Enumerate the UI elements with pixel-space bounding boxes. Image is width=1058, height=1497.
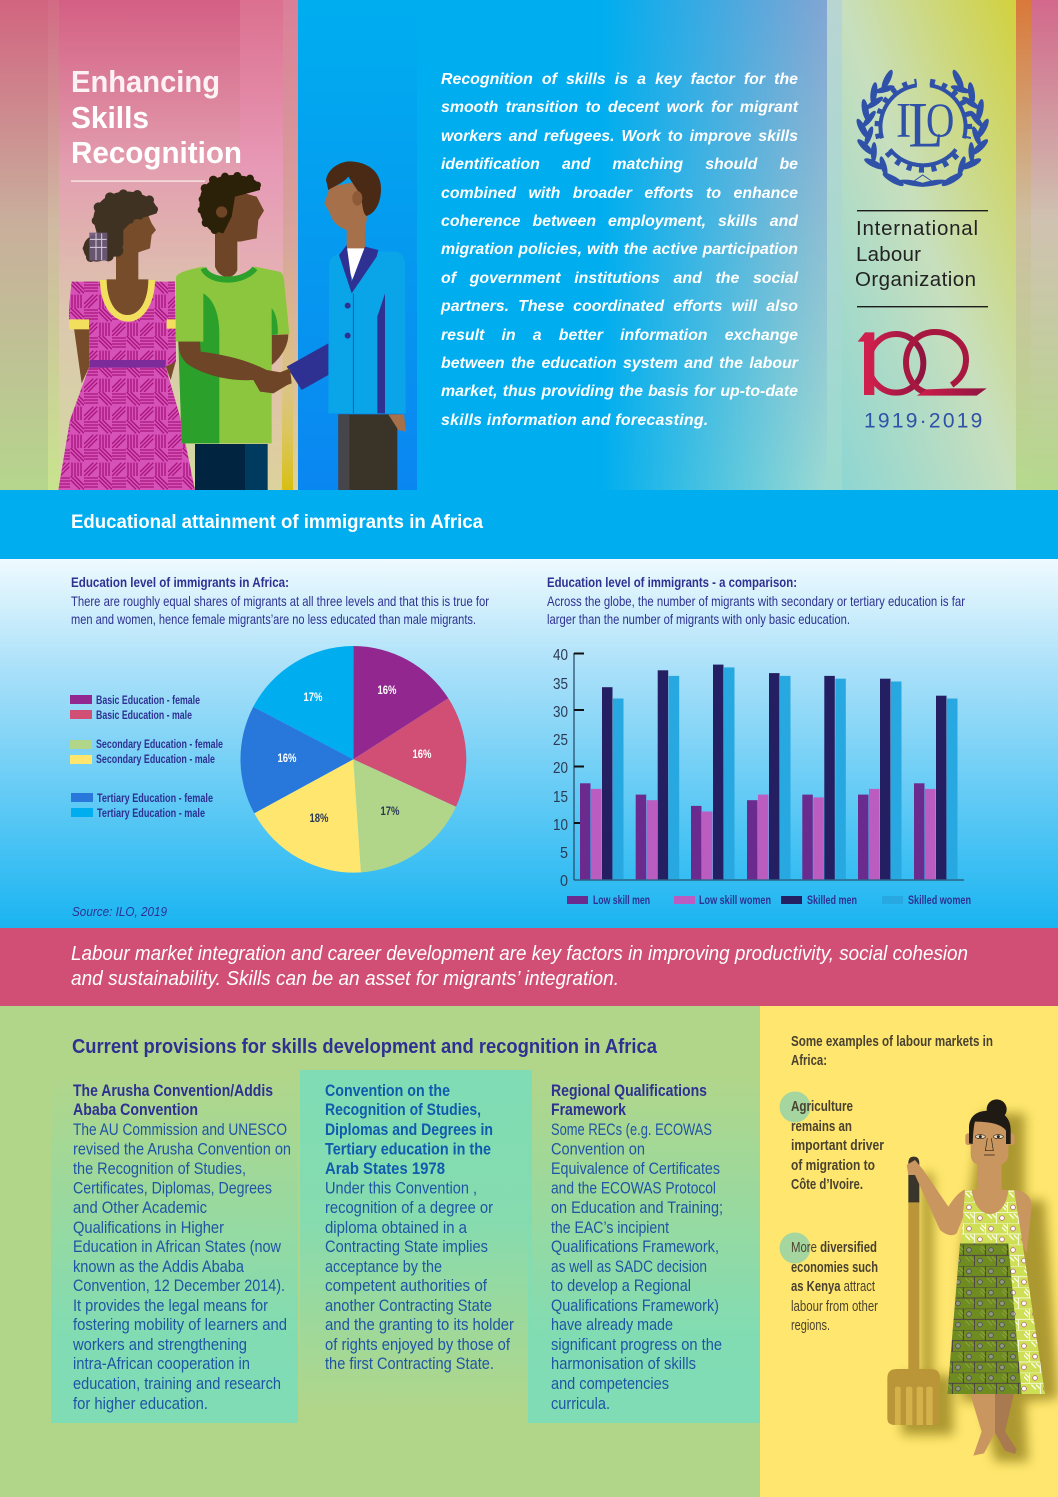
text block: pie chart intro: There are roughly equal shares of migrants at all three levels and that this is true for [71,593,489,609]
panel: Regional Qualifications Framework: significant progress on the [551,1336,722,1354]
panel: Regional Qualifications Framework: Qualifications Framework, [551,1238,719,1256]
text block: recognition of skills intro paragraph: coherence between employment, skills and [441,213,798,230]
text: agriculture example: Agriculture [791,1098,853,1115]
panel: Regional Qualifications Framework: Regional Qualifications [551,1082,707,1100]
figure: woman in pink dress [58,189,195,490]
text: agriculture example: of migration to [791,1157,875,1174]
bar chart axis labels: 15 [553,789,568,806]
text block: pie chart intro [71,574,489,627]
logo text: International Labour Organization: Labour [856,243,921,266]
panel: Regional Qualifications Framework: have already made [551,1316,673,1334]
illustration: woman farmer with pitchfork [887,1099,1058,1462]
bar chart axis labels: 30 [553,704,568,721]
panel: Arusha Convention: known as the Addis Ababa [73,1258,245,1276]
pie chart: 18% [310,813,328,825]
title: Recognition [71,135,242,170]
bars: low skill men [580,783,924,879]
bar chart axis labels [553,647,568,890]
section heading band: educational attainment [0,490,1058,560]
bar chart axis labels: 5 [560,845,568,862]
text block: bar chart intro: Across the globe, the number of migrants with secondary or tertiary education is far [547,593,965,609]
panel: Arusha Convention: fostering mobility of learners and [73,1316,287,1334]
text block: labour market examples [780,1033,993,1334]
logo: ILO 100 years: 1919·2019 [864,410,982,433]
text block: labour market examples: Africa: [791,1052,827,1069]
legend: bar chart: Low skill men [593,893,650,907]
text block: recognition of skills intro paragraph: combined with broader efforts to enhance [441,185,798,202]
text block: recognition of skills intro paragraph: of government institutions and the social [441,270,798,287]
title: Skills [71,100,149,135]
panel: Arab States Convention [300,1070,532,1410]
logo: ILO emblem [854,68,991,188]
legend: pie chart: Tertiary Education - female [97,791,213,805]
legend: bar chart: Skilled men [807,893,857,907]
text: agriculture example: important driver [791,1137,884,1154]
panel: Arab States Convention: and the granting to its holder [325,1316,514,1334]
icon: green circle behind Agriculture [780,1092,810,1122]
panel: Arab States Convention: the first Contracting State. [325,1355,494,1373]
legend: bar chart [567,893,971,907]
panel: Arab States Convention: Recognition of Studies, [325,1101,481,1119]
text block: recognition of skills intro paragraph: identification and matching should be [441,156,798,173]
logo letters: ILO: L [908,90,943,162]
callout band: labour market integration: Labour market integration and career development are key factors in improving productivity, social cohesion [71,943,968,965]
panel: Regional Qualifications Framework: the EAC’s incipient [551,1219,669,1237]
legend: pie chart: Secondary Education - female [96,737,223,751]
panel: Regional Qualifications Framework: to develop a Regional [551,1277,691,1295]
pie chart [240,646,466,873]
panel: Regional Qualifications Framework: Some RECs (e.g. ECOWAS [551,1121,712,1139]
logo letters: ILO: I [896,92,911,148]
text: agriculture example [791,1098,884,1193]
text block: pie chart intro: Education level of immigrants in Africa: [71,574,289,590]
panel: Arab States Convention: Tertiary education in the [325,1140,491,1158]
text block: recognition of skills intro paragraph: between the education system and the labour [441,355,798,372]
text block: pie chart intro: men and women, hence female migrants’are no less educated than male migrants. [71,611,476,627]
panel: Arusha Convention: for higher education. [73,1395,208,1413]
icon: cog wheel arcs [878,82,969,169]
text: diversified economies example [791,1239,878,1334]
figure: man in blue jacket [263,161,406,490]
title [71,64,242,182]
text: agriculture example: Côte d’Ivoire. [791,1176,863,1193]
panel: Arab States Convention: diploma obtained in a [325,1219,468,1237]
logo text: International Labour Organization: International [856,217,978,240]
pie chart: 17% [380,806,400,818]
panel: Regional Qualifications Framework: harmonisation of skills [551,1355,696,1373]
pitchfork [887,1157,940,1425]
panel: Regional Qualifications Framework: as well as SADC decision [551,1258,707,1276]
panel: Arusha Convention: education, training and research [73,1375,281,1393]
text: agriculture example: remains an [791,1118,852,1135]
panel: green provisions background [0,1006,760,1497]
legend: pie chart: Secondary Education - male [96,752,215,766]
title: Enhancing [71,64,220,99]
panel: Arusha Convention: The Arusha Convention/Addis [73,1082,273,1100]
panel: Regional Qualifications Framework: Equivalence of Certificates [551,1160,720,1178]
icon: green circle behind More [780,1232,810,1264]
panel: Arab States Convention: recognition of a degree or [325,1199,493,1217]
text block: recognition of skills intro paragraph: partners. These coordinated efforts will also [441,298,798,315]
text: diversified economies example: labour from other [791,1298,878,1315]
panel: Arab States Convention: Under this Convention , [325,1180,477,1198]
panel: Arusha Convention: Education in African States (now [73,1238,281,1256]
panel: Arusha Convention: Certificates, Diplomas, Degrees [73,1180,272,1198]
pie chart: 16% [378,685,396,697]
panel: Arusha Convention: Ababa Convention [73,1101,198,1119]
pie chart: 16% [278,753,296,765]
text: diversified economies example: as Kenya attract [791,1278,876,1295]
text block: recognition of skills intro paragraph: workers and refugees. Work to improve skills [441,128,798,145]
logo letters: ILO: O [926,95,954,148]
panel: Regional Qualifications Framework: on Education and Training; [551,1199,723,1217]
text: diversified economies example: economies such [791,1259,878,1276]
figure: woman farmer [907,1099,1045,1456]
panel: Arab States Convention: acceptance by the [325,1258,442,1276]
bars: skilled men [602,665,946,879]
legend: pie chart [70,693,223,820]
text: diversified economies example: regions. [791,1317,830,1334]
icon: laurel wreath [854,68,991,188]
panel: Arusha Convention: intra-African cooperation in [73,1355,250,1373]
pie chart: 17% [304,692,322,704]
soft shadow of figure [902,1113,1058,1462]
panel: Arusha Convention [51,1075,298,1423]
legend: bar chart: Skilled women [908,893,971,907]
panel: Regional Qualifications Framework: Convention on [551,1140,645,1158]
text block: recognition of skills intro paragraph: migration policies, with the active participation [441,241,798,258]
text block: recognition of skills intro paragraph: skills information and forecasting. [441,412,708,429]
figure: man in green shirt [176,172,290,490]
legend: pie chart: Tertiary Education - male [97,806,205,820]
panel: Regional Qualifications Framework: and competencies [551,1375,669,1393]
pie chart: 16% [412,749,432,761]
bar chart axis labels: 40 [553,647,568,664]
text block: recognition of skills intro paragraph: Recognition of skills is a key factor for the [441,71,798,88]
panel: Arusha Convention: workers and strengthening [72,1336,247,1354]
text block: recognition of skills intro paragraph: smooth transition to decent work for migrant [441,99,798,116]
text block: labour market examples: Some examples of labour markets in [791,1033,993,1050]
bar chart [553,647,971,907]
heading: current provisions: Current provisions for skills development and recognition in Africa [72,1036,658,1058]
source note: Source: ILO, 2019 [72,904,167,919]
panel: Arab States Convention: Contracting State implies [325,1238,488,1256]
panel: Regional Qualifications Framework: Qualifications Framework) [551,1297,719,1315]
text block: recognition of skills intro paragraph [440,71,799,429]
panel: Arusha Convention: Qualifications in Higher [73,1219,224,1237]
panel: Regional Qualifications Framework: Framework [551,1101,627,1119]
panel: Arab States Convention: competent authorities of [325,1277,487,1295]
panel: Arusha Convention: and Other Academic [73,1199,207,1217]
panel: Arab States Convention: Diplomas and Degrees in [325,1121,493,1139]
panel: Arab States Convention: Arab States 1978 [325,1160,445,1178]
logo text: International Labour Organization: Organization [855,268,976,291]
text: diversified economies example: More diversified [791,1239,877,1256]
bar chart axis labels: 25 [553,732,568,749]
panel: charts background [0,559,1058,929]
text block: bar chart intro [547,574,965,627]
bar chart axis labels: 35 [553,676,568,693]
bars: low skill women [591,789,936,879]
bar chart axis labels: 0 [560,873,568,890]
callout band: labour market integration [0,928,1058,1006]
panel: hero background [0,0,1058,491]
panel: Arab States Convention: another Contracting State [325,1297,492,1315]
logo letters: ILO [896,90,954,162]
panel: Arusha Convention: The AU Commission and UNESCO [73,1121,287,1139]
legend: pie chart: Basic Education - male [96,708,192,722]
legend: bar chart: Low skill women [699,893,771,907]
legend: pie chart: Basic Education - female [96,693,200,707]
panel: Arusha Convention: revised the Arusha Convention on [73,1140,291,1158]
panel: Regional Qualifications Framework: curricula. [551,1395,610,1413]
panel: Arab States Convention: of rights enjoyed by those of [325,1336,510,1354]
bars: skilled women [613,667,958,879]
panel: Regional Qualifications Framework [528,1075,760,1423]
logo: ILO 100 years [858,332,987,433]
bar chart axis labels: 10 [553,817,568,834]
panel: Arab States Convention: Convention on the [325,1082,450,1100]
bar chart axis labels: 20 [553,760,568,777]
text block: bar chart intro: larger than the number of migrants with only basic education. [547,611,850,627]
logo text: International Labour Organization [855,210,988,307]
text block: bar chart intro: Education level of immigrants - a comparison: [547,574,797,590]
panel: yellow labour markets background [760,1006,1058,1497]
panel: Arusha Convention: It provides the legal means for [73,1297,268,1315]
text block: recognition of skills intro paragraph: market, thus providing the basis for up-to-date [441,383,798,400]
panel: Arusha Convention: Convention, 12 December 2014). [73,1277,285,1295]
text block: recognition of skills intro paragraph: result in a better information exchange [441,327,798,344]
callout band: labour market integration: and sustainability. Skills can be an asset for migrants’ integration. [71,968,619,990]
panel: Arusha Convention: the Recognition of Studies, [73,1160,246,1178]
section heading band: educational attainment: Educational attainment of immigrants in Africa [71,511,483,533]
illustration: three people shaking hands [58,161,406,490]
panel: Regional Qualifications Framework: and the ECOWAS Protocol [551,1180,716,1198]
